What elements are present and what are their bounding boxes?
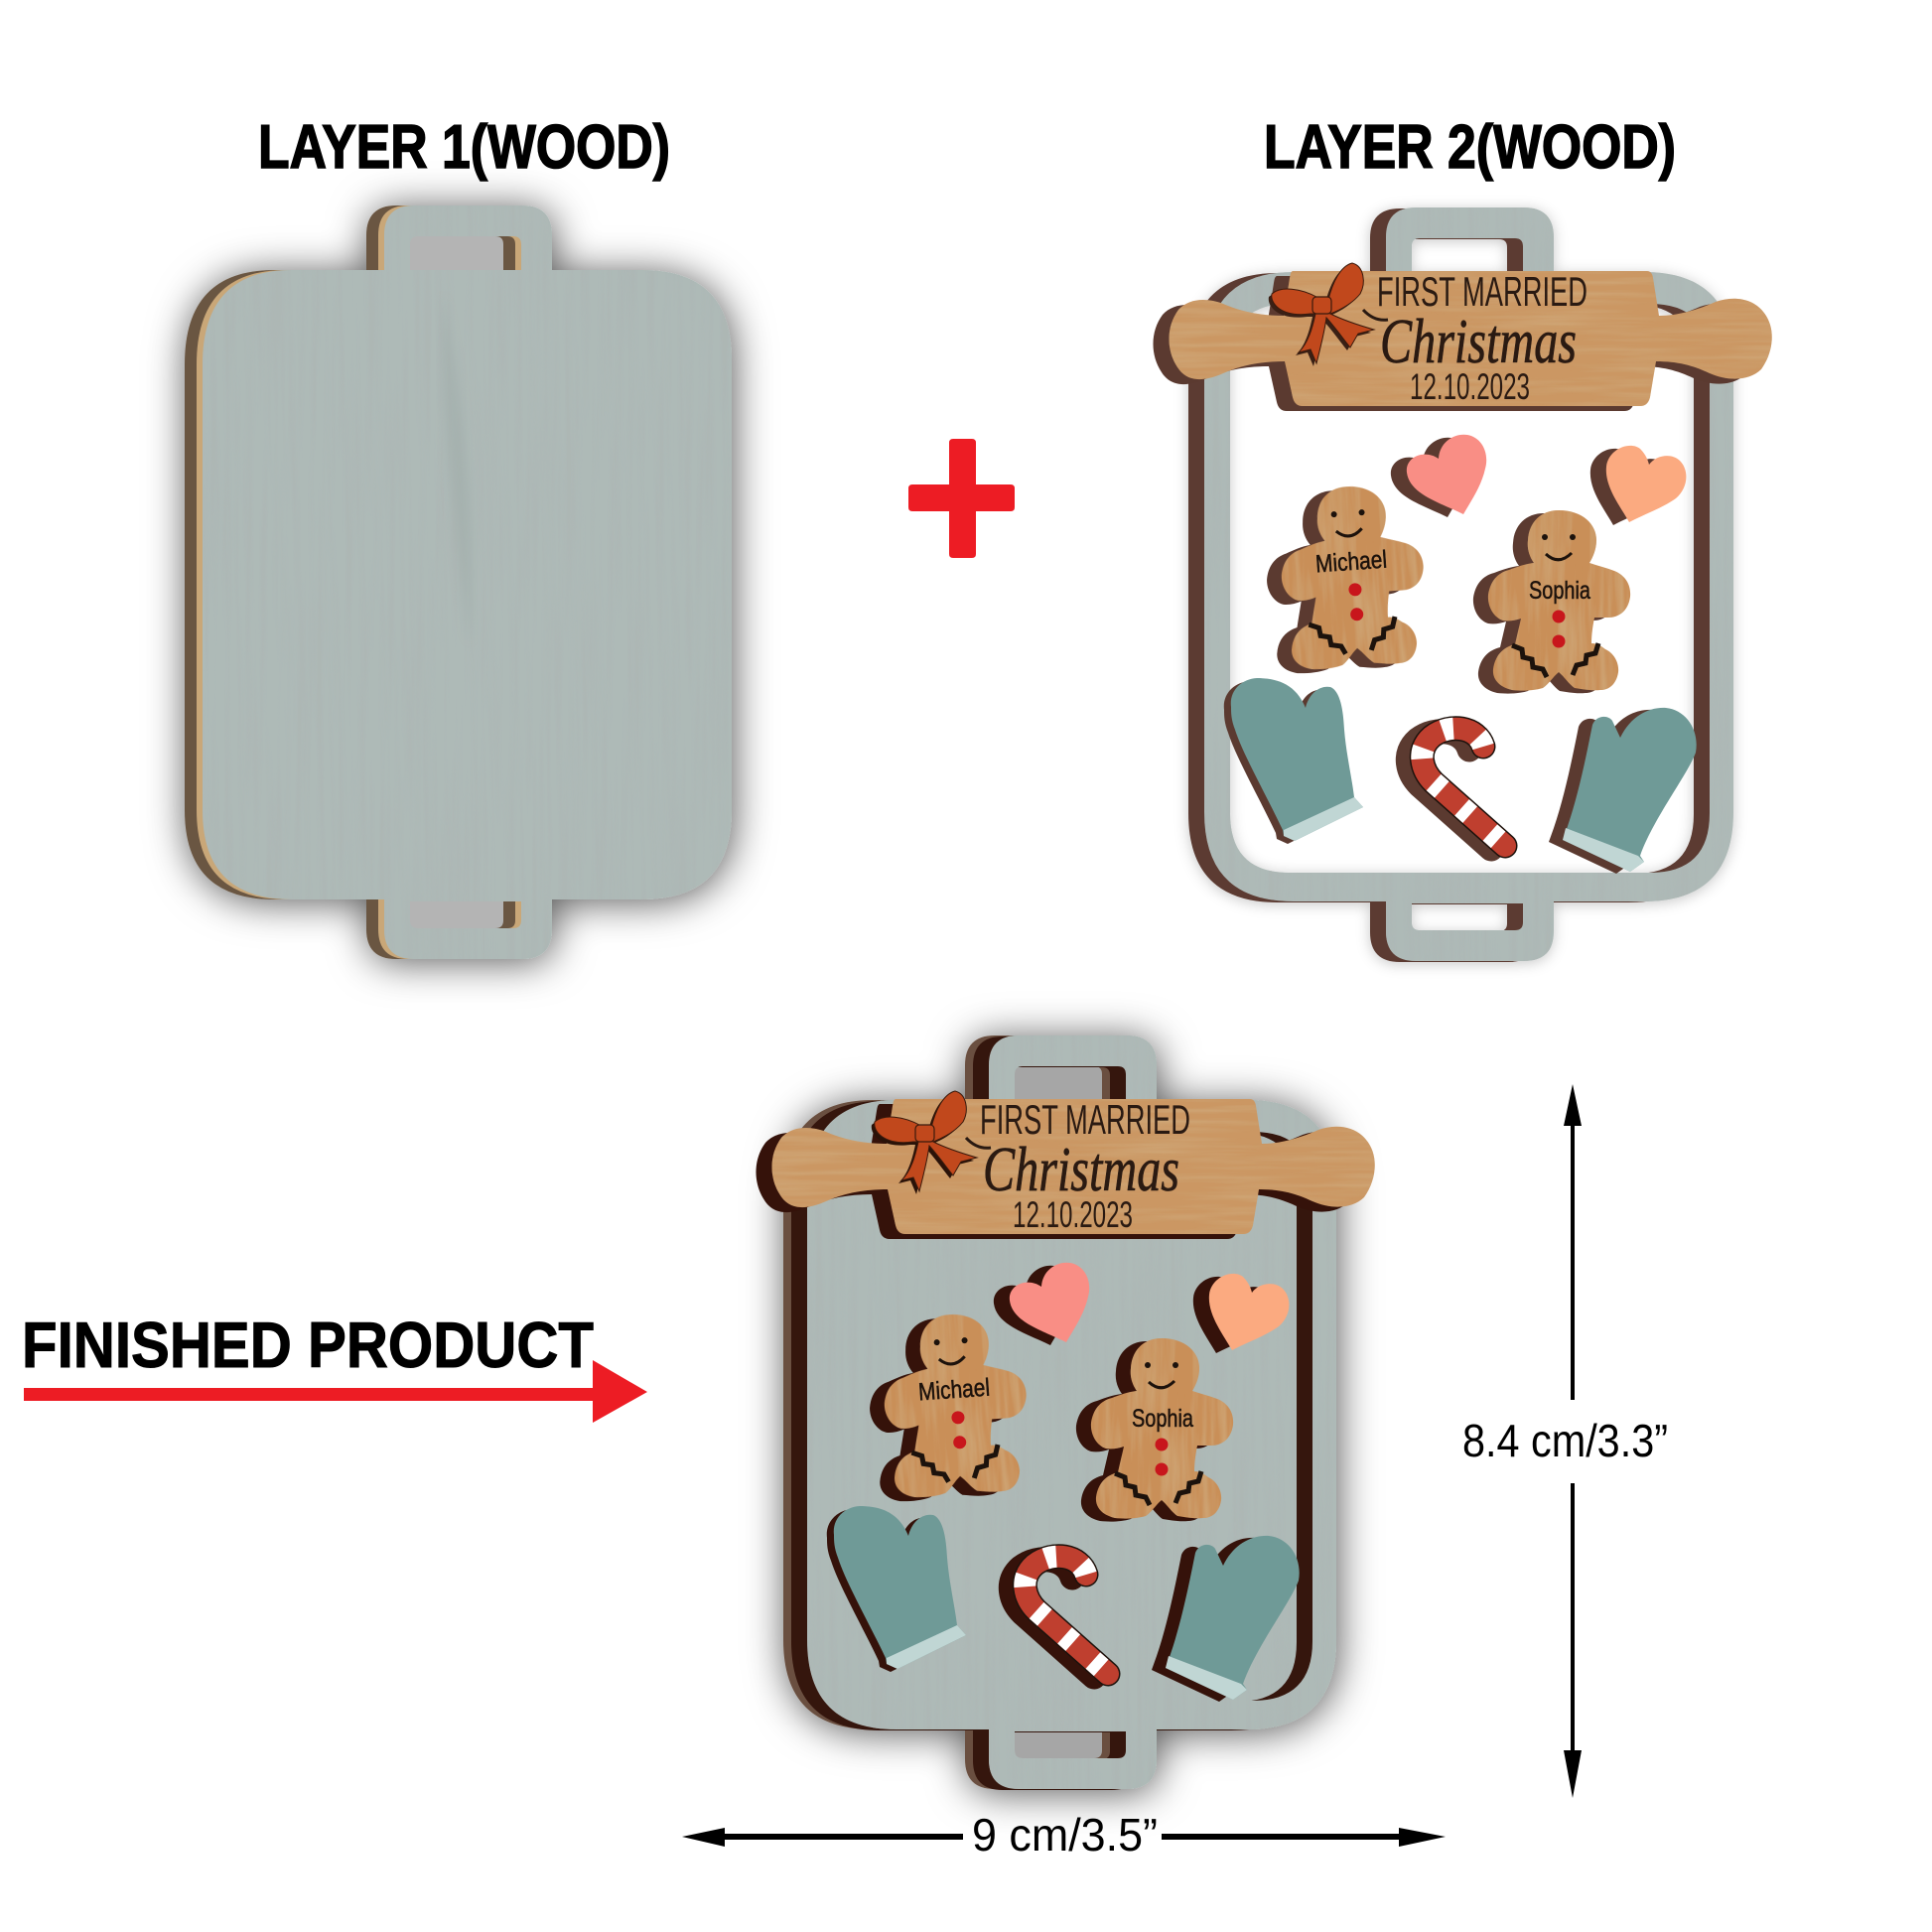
candy cane xyxy=(1408,729,1505,849)
gingerbread: Michael: Michael xyxy=(917,1374,991,1407)
text: first married: FIRST MARRIED xyxy=(980,1096,1190,1143)
heart: pink xyxy=(1391,435,1486,517)
dimension label: width: 9 cm/3.5” xyxy=(972,1809,1158,1861)
arrow: red pointing right xyxy=(24,1360,647,1423)
gingerbread: Sophia: Sophia xyxy=(1132,1405,1193,1433)
gingerbread: Michael xyxy=(864,1310,1034,1503)
flourish xyxy=(966,1138,991,1148)
oven mitt: left xyxy=(1224,678,1363,844)
heart: peach xyxy=(1590,446,1686,525)
backing board and tray frame xyxy=(783,1035,1336,1790)
candy cane xyxy=(1011,1557,1108,1677)
flourish xyxy=(1363,310,1388,320)
panel: layer 2 frame with decorations xyxy=(1153,207,1772,962)
heading: layer 2: LAYER 2(WOOD) xyxy=(1264,113,1676,182)
panel: finished product xyxy=(756,1035,1375,1790)
heading: finished product: FINISHED PRODUCT xyxy=(22,1309,594,1381)
bow xyxy=(1269,263,1374,366)
bow xyxy=(872,1091,977,1194)
gingerbread: Sophia: Sophia xyxy=(1529,577,1590,605)
heart: pink xyxy=(994,1263,1089,1345)
text: first married: FIRST MARRIED xyxy=(1377,268,1587,315)
gingerbread: Michael xyxy=(1261,482,1431,675)
text: date: 12.10.2023 xyxy=(1013,1194,1133,1235)
panel: layer 1 wooden board xyxy=(185,206,732,959)
dimension label: height: 8.4 cm/3.3” xyxy=(1462,1415,1668,1466)
rolling pin xyxy=(1153,271,1772,411)
dimension: width arrow xyxy=(682,1828,1446,1847)
heading: layer 1: LAYER 1(WOOD) xyxy=(258,113,670,182)
oven mitt: right xyxy=(1152,1536,1300,1702)
dimension: height arrow xyxy=(1564,1084,1582,1798)
icon: red plus sign xyxy=(908,439,1015,558)
rolling pin xyxy=(756,1099,1375,1239)
gingerbread: Sophia xyxy=(1473,510,1630,694)
text: christmas: Christmas xyxy=(983,1134,1179,1204)
heart: peach xyxy=(1193,1274,1289,1353)
oven mitt: left xyxy=(827,1506,966,1672)
gingerbread: Sophia xyxy=(1076,1338,1233,1522)
text: christmas: Christmas xyxy=(1380,306,1577,376)
text: date: 12.10.2023 xyxy=(1410,366,1530,407)
gingerbread: Michael: Michael xyxy=(1314,546,1388,579)
oven mitt: right xyxy=(1549,708,1697,874)
baking tray frame xyxy=(1188,207,1733,962)
